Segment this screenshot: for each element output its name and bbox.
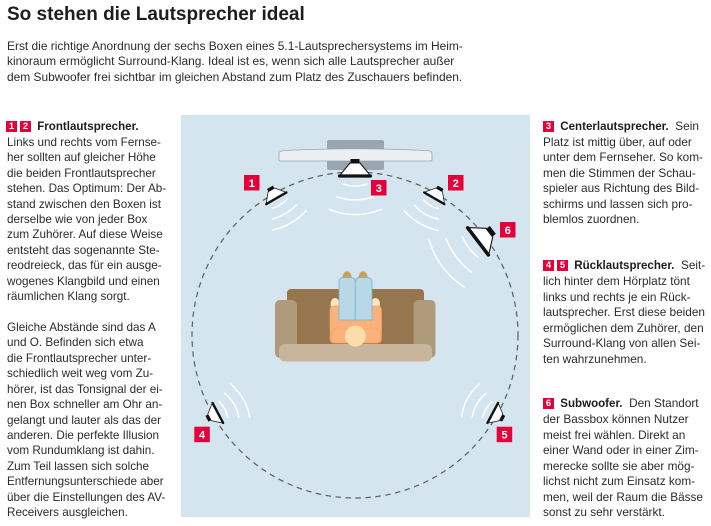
- text block: Subwoofer: der Bassbox können Nutzer: [543, 412, 689, 426]
- intro text: Erst die richtige Anordnung der sechs Boxen eines 5.1-Lautsprechersystems im Heim-: [7, 39, 463, 53]
- speaker 6: [468, 216, 503, 255]
- text block: Centerlautsprecher: men die Stimmen der Schau-: [543, 166, 696, 180]
- label 1: [244, 175, 260, 190]
- sofa: [275, 289, 436, 362]
- text block: Frontlautsprecher: Frontlautsprecher.: [37, 120, 139, 132]
- speaker 1: [260, 181, 286, 204]
- text block: Abstände: Entfernungsunterschiede aber: [7, 475, 164, 488]
- text block: Centerlautsprecher: Platz ist mittig über, auf oder: [543, 135, 692, 149]
- text block: Abstände: nen Box schneller am Ohr an-: [7, 398, 162, 411]
- label 2: 2: [453, 178, 459, 190]
- text block: Abstände: anderen. Die perfekte Illusion: [7, 429, 159, 442]
- text block: Subwoofer: 6: [546, 398, 551, 409]
- label 1: 1: [249, 178, 255, 190]
- text block: Subwoofer: merecke sollte sie aber mög-: [543, 459, 694, 473]
- text block: Subwoofer: meist frei wählen. Direkt an: [543, 428, 685, 442]
- text block: Abstände: die Frontlautsprecher unter-: [7, 352, 151, 365]
- text block: Abstände: [7, 321, 165, 519]
- text block: Subwoofer: men, weil der Raum die Bässe: [543, 490, 703, 504]
- text block: Rücklautsprecher: links und rechts je ein Rück-: [543, 290, 691, 304]
- speaker 5: [487, 403, 509, 429]
- intro text: dem Subwoofer frei sichtbar im gleichen Abstand zum Platz des Zuschauers befinden.: [7, 70, 462, 84]
- text block: Rücklautsprecher: lich hinter dem Hörplatz tönt: [543, 274, 690, 288]
- text block: Rücklautsprecher: lautsprecher. Erst diese beiden: [543, 305, 705, 319]
- text block: Rücklautsprecher: ten wahrzunehmen.: [543, 352, 647, 366]
- label 3: [371, 180, 386, 196]
- label 5: 5: [501, 430, 508, 442]
- text block: Rücklautsprecher: Surround-Klang von allen Sei-: [543, 336, 700, 350]
- text block: Rücklautsprecher: 5: [560, 260, 565, 271]
- text block: Frontlautsprecher: [6, 120, 166, 303]
- text block: Abstände: über die Einstellungen des AV-: [7, 491, 165, 504]
- speaker 3: [340, 159, 370, 176]
- intro text: kinoraum ermöglicht Surround-Klang. Ideal ist es, wenn sich alle Lautsprecher außer: [7, 54, 454, 68]
- text block: Subwoofer: einer Wand oder in einer Zim-: [543, 443, 699, 457]
- text block: Centerlautsprecher: spieler aus Richtung des Bild-: [543, 181, 699, 195]
- text block: Abstände: Gleiche Abstände sind das A: [7, 321, 156, 334]
- text block: Rücklautsprecher: 4: [546, 260, 551, 271]
- text block: Centerlautsprecher: [543, 118, 703, 226]
- text block: Abstände: schiedlich weit weg vom Zu-: [7, 367, 153, 380]
- text block: Frontlautsprecher: stand zwischen den Boxen ist: [7, 198, 161, 211]
- text block: Centerlautsprecher: Centerlautsprecher. Sein: [560, 118, 699, 132]
- text block: Abstände: gelangt und lauter als das der: [7, 414, 161, 427]
- text block: Subwoofer: sonst zu sehr verstärkt.: [543, 505, 665, 519]
- text block: Rücklautsprecher: [543, 258, 705, 366]
- speaker 2: [424, 181, 451, 204]
- title: So stehen die Lautsprecher ideal: [7, 4, 305, 25]
- television: [279, 140, 432, 170]
- text block: Abstände: vom Rundumklang ist dahin.: [7, 444, 154, 457]
- text block: Abstände: Zum Teil lassen sich solche: [7, 460, 149, 473]
- text block: Centerlautsprecher: 3: [546, 120, 551, 132]
- listening circle: [192, 172, 518, 498]
- text block: Abstände: hörer, ist das Tonsignal der ei-: [7, 383, 163, 396]
- text block: Frontlautsprecher: entsteht das sogenannte Ste-: [7, 244, 160, 257]
- person: [330, 271, 382, 346]
- label 5: [497, 427, 512, 442]
- text block: Frontlautsprecher: 2: [23, 120, 28, 132]
- text block: Frontlautsprecher: die beiden Frontlautsprecher: [7, 167, 156, 180]
- label 4: [194, 427, 210, 442]
- text block: Frontlautsprecher: 1: [9, 120, 14, 132]
- panel: room background: [181, 115, 530, 517]
- speaker 4: [202, 403, 223, 429]
- label 6: 6: [505, 225, 511, 237]
- text block: Frontlautsprecher: reodreieck, das für ein ausge-: [7, 259, 162, 272]
- text block: Frontlautsprecher: räumlichen Klang sorgt.: [7, 290, 130, 303]
- label 2: [448, 175, 464, 190]
- label 4: 4: [199, 430, 206, 442]
- text block: Rücklautsprecher: Rücklautsprecher. Seit-: [574, 258, 705, 272]
- text block: Frontlautsprecher: zum Zuhörer. Auf diese Weise: [7, 228, 163, 241]
- text block: Frontlautsprecher: Links und rechts vom Fernse-: [7, 136, 161, 149]
- text block: Subwoofer: Subwoofer. Den Standort: [560, 396, 699, 410]
- text block: Abstände: Receivers ausgleichen.: [7, 506, 128, 519]
- text block: Subwoofer: lichst nicht zum Einsatz kom-: [543, 474, 695, 488]
- text block: Subwoofer: [543, 396, 703, 519]
- text block: Centerlautsprecher: blemlos zuordnen.: [543, 212, 639, 226]
- text block: Centerlautsprecher: schirms und lassen sich pro-: [543, 197, 692, 211]
- text block: Rücklautsprecher: ermöglichen dem Zuhörer, den: [543, 321, 704, 335]
- sound waves: [219, 184, 492, 417]
- text block: Frontlautsprecher: derselbe wie von jeder Box: [7, 213, 147, 226]
- text block: Frontlautsprecher: wogenes Klangbild und einen: [7, 275, 160, 288]
- text block: Abstände: und O. Befinden sich etwa: [7, 336, 143, 349]
- text block: Frontlautsprecher: stehen. Das Optimum: Der Ab-: [7, 182, 166, 195]
- label 3: 3: [376, 183, 382, 195]
- text block: Centerlautsprecher: unter dem Fernseher. So kom-: [543, 150, 703, 164]
- text block: Frontlautsprecher: her sollten auf gleicher Höhe: [7, 151, 156, 164]
- label 6: [500, 222, 516, 238]
- intro text: [7, 39, 463, 84]
